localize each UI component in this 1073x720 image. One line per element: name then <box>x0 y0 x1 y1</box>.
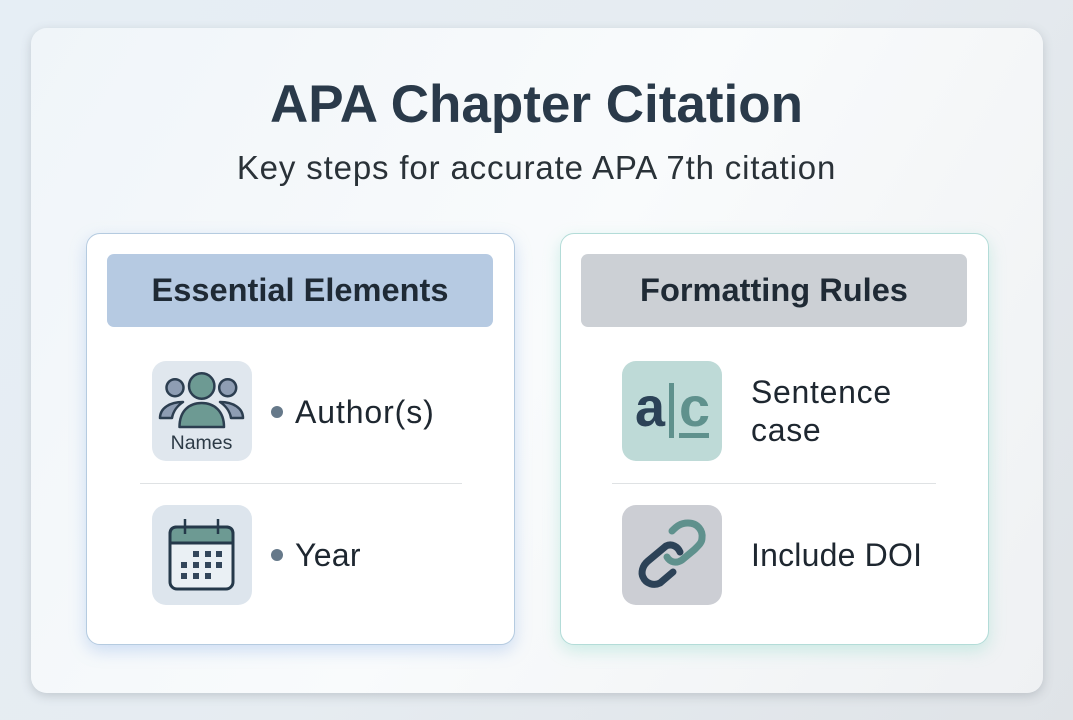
icon: sentence case <box>622 361 722 461</box>
heading: formatting rules: Formatting Rules <box>640 271 908 308</box>
bullet: year <box>271 549 283 561</box>
icon: sentence case: c <box>679 375 710 438</box>
icon: link <box>622 505 722 605</box>
icon: sentence case: a <box>635 375 666 438</box>
icon: people: Names <box>171 432 233 454</box>
text: sentence case: case <box>751 412 821 448</box>
heading: essential elements <box>107 254 493 327</box>
text: year: Year <box>295 537 361 573</box>
icon: calendar <box>152 505 252 605</box>
subtitle: Key steps for accurate APA 7th citation <box>237 149 836 186</box>
text: sentence case <box>751 374 892 448</box>
title: APA Chapter Citation <box>270 75 803 134</box>
heading: essential elements: Essential Elements <box>152 271 448 308</box>
heading: formatting rules <box>581 254 967 327</box>
text: author: Author(s) <box>295 394 435 430</box>
icon: people <box>152 361 252 461</box>
bullet: author <box>271 406 283 418</box>
text: include doi: Include DOI <box>751 537 922 573</box>
panel: formatting rules <box>560 233 989 645</box>
panel: essential elements <box>86 233 515 645</box>
text: sentence case: Sentence <box>751 374 892 410</box>
